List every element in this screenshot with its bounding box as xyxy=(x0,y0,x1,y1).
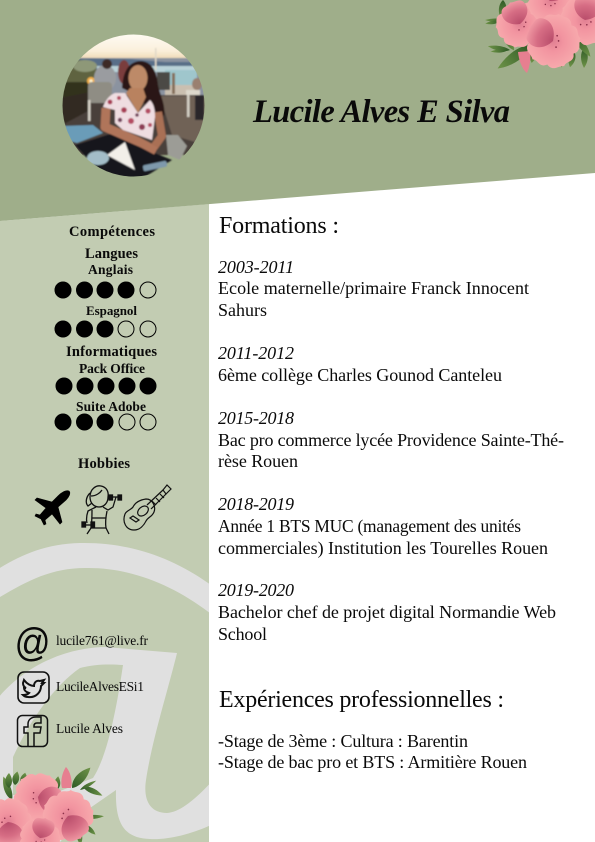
label: Pack Office: Pack Office xyxy=(79,361,145,376)
heading: Compétences: Compétences xyxy=(69,224,155,240)
entry: 2015-2018 xyxy=(218,408,564,471)
text: twitter handle: LucileAlvesESi1 xyxy=(56,679,144,694)
heading: Informatiques: Informatiques xyxy=(66,344,157,360)
label: Anglais: Anglais xyxy=(88,262,133,277)
rating: Pack Office 5 of 5 xyxy=(56,378,156,394)
panel: skills sidebar xyxy=(0,204,209,842)
watermark: large at sign xyxy=(0,543,215,842)
flowers: top right xyxy=(485,0,595,83)
label: Suite Adobe: Suite Adobe xyxy=(76,399,146,414)
entry: 2019-2020: School xyxy=(218,624,267,644)
text: work experience list: -Stage de 3ème : Cultura : Barentin xyxy=(218,731,468,751)
entry: 2015-2018: 2015-2018 xyxy=(218,408,294,428)
entry: 2011-2012: 6ème collège Charles Gounod Canteleu xyxy=(218,365,502,385)
entry: 2018-2019: commerciales) Institution les Tourelles Rouen xyxy=(218,538,548,559)
entry: 2015-2018: Bac pro commerce lycée Providence Sainte-Thé- xyxy=(218,430,564,450)
icon: facebook xyxy=(18,716,48,746)
icon: twitter xyxy=(18,672,49,703)
heading: Formations: Formations : xyxy=(219,213,339,239)
entry: 2019-2020: Bachelor chef de projet digital Normandie Web xyxy=(218,602,556,622)
title: Lucile Alves E Silva xyxy=(252,94,510,130)
text: work experience list xyxy=(218,731,527,772)
entry: 2018-2019: 2018-2019 xyxy=(218,494,294,514)
heading: Expériences professionnelles: Expériences professionnelles : xyxy=(219,687,504,713)
icon: airplane xyxy=(35,491,70,525)
entry: 2018-2019: Année 1 BTS MUC (management des unités xyxy=(218,516,521,536)
heading: Hobbies: Hobbies xyxy=(78,456,130,472)
rating: Espagnol 3 of 5 xyxy=(55,321,156,337)
icon: woman lifting dumbbell xyxy=(82,486,122,534)
panel: header band xyxy=(0,0,595,221)
photo: portrait in circle xyxy=(62,34,204,176)
entry: 2011-2012 xyxy=(218,343,502,385)
entry: 2019-2020 xyxy=(218,580,556,644)
text: email address: lucile761@live.fr xyxy=(56,633,148,648)
rating: Suite Adobe 3 of 5 xyxy=(55,414,156,430)
entry: 2011-2012: 2011-2012 xyxy=(218,343,294,363)
icon: guitar xyxy=(124,485,171,530)
label: Espagnol: Espagnol xyxy=(86,303,137,318)
entry: 2003-2011: Sahurs xyxy=(218,300,267,320)
entry: 2003-2011 xyxy=(218,257,529,320)
entry: 2003-2011: Ecole maternelle/primaire Franck Innocent xyxy=(218,278,529,298)
text: work experience list: -Stage de bac pro et BTS : Armitière Rouen xyxy=(218,752,527,772)
heading: Langues: Langues xyxy=(85,246,138,262)
entry: 2018-2019 xyxy=(218,494,548,559)
entry: 2019-2020: 2019-2020 xyxy=(218,580,294,600)
rating: Anglais 4 of 5 xyxy=(55,282,156,298)
icon: email at sign: @ xyxy=(14,621,50,665)
flowers: bottom left xyxy=(0,764,106,842)
entry: 2003-2011: 2003-2011 xyxy=(218,257,294,277)
entry: 2015-2018: rèse Rouen xyxy=(218,451,298,471)
text: facebook name: Lucile Alves xyxy=(56,721,123,736)
